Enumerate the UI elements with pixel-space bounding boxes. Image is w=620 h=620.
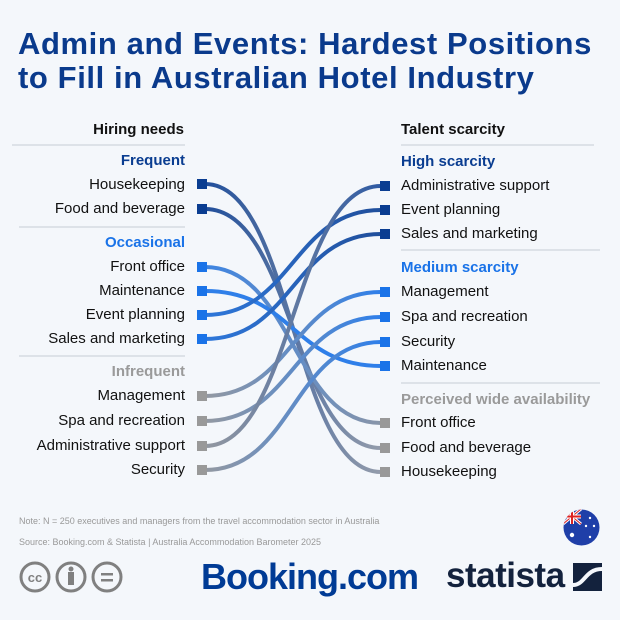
right labels: Maintenance xyxy=(401,357,487,374)
right labels: Food and beverage xyxy=(401,439,531,456)
left labels: Event planning xyxy=(86,306,185,323)
left labels: Maintenance xyxy=(99,282,185,299)
left labels: Front office xyxy=(110,258,185,275)
right labels: Perceived wide availability xyxy=(401,391,590,408)
right labels: Medium scarcity xyxy=(401,259,519,276)
left labels: Sales and marketing xyxy=(48,330,185,347)
right labels xyxy=(401,153,590,480)
right labels: Spa and recreation xyxy=(401,308,528,325)
left labels: Spa and recreation xyxy=(58,412,185,429)
logo: booking.com: Booking.com xyxy=(201,556,418,597)
source: Source: Booking.com & Statista | Australia Accommodation Barometer 2025 xyxy=(19,537,321,547)
icon: australia flag xyxy=(564,510,600,546)
logo: statista: statista xyxy=(446,556,565,595)
right labels: Housekeeping xyxy=(401,463,497,480)
title xyxy=(18,26,592,95)
right labels: Administrative support xyxy=(401,177,549,194)
left labels: Security xyxy=(131,461,185,478)
heading: hiring needs: Hiring needs xyxy=(93,121,184,138)
left labels: Housekeeping xyxy=(89,176,185,193)
left labels: Food and beverage xyxy=(55,200,185,217)
right labels: Front office xyxy=(401,414,476,431)
right labels: Management xyxy=(401,283,489,300)
left labels: Infrequent xyxy=(112,363,185,380)
icon: creative commons: cc xyxy=(28,570,42,585)
icon: creative commons xyxy=(20,562,122,592)
title: Admin and Events: Hardest Positions xyxy=(18,26,592,61)
right labels: Event planning xyxy=(401,201,500,218)
left labels: Occasional xyxy=(105,234,185,251)
right labels: Security xyxy=(401,333,455,350)
right labels: High scarcity xyxy=(401,153,495,170)
title: to Fill in Australian Hotel Industry xyxy=(18,60,534,95)
left labels: Management xyxy=(97,387,185,404)
heading: talent scarcity: Talent scarcity xyxy=(401,121,505,138)
note: Note: N = 250 executives and managers from the travel accommodation sector in Australia xyxy=(19,516,379,526)
left labels: Frequent xyxy=(121,152,185,169)
right labels: Sales and marketing xyxy=(401,225,538,242)
left labels xyxy=(36,152,185,478)
left labels: Administrative support xyxy=(37,437,185,454)
